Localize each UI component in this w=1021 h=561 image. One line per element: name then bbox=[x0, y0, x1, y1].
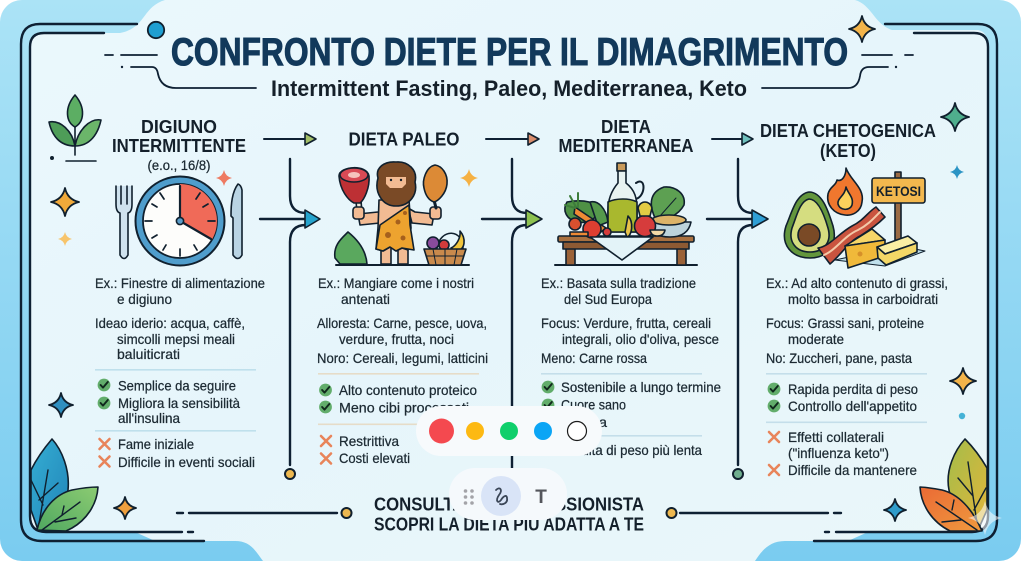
list: pros: ra bbox=[594, 414, 607, 430]
icon: avocado, flame, bacon, cheese and sign bbox=[784, 168, 925, 268]
heading: mediterranea bbox=[558, 116, 694, 156]
heading: paleo: DIETA PALEO bbox=[348, 128, 460, 150]
text: description: Ex.: Mangiare come i nostri bbox=[318, 275, 474, 291]
list: pros: Meno cibi processati bbox=[339, 400, 469, 416]
panel: dieta chetogenica bbox=[760, 120, 948, 478]
list: pros bbox=[318, 382, 479, 425]
icon: leaves bottom left bbox=[31, 439, 98, 531]
text: description: Focus: Grassi sani, proteine bbox=[766, 315, 924, 331]
text: description: Ex.: Ad alto contenuto di grassi, bbox=[766, 275, 948, 291]
list: cons: Difficile da mantenere bbox=[788, 462, 917, 478]
title decoration lines bbox=[105, 22, 913, 88]
icon: leaves bottom right bbox=[920, 439, 987, 531]
text: description: Alloresta: Carne, pesce, uova, bbox=[317, 315, 487, 331]
text: description: moderate bbox=[788, 331, 844, 347]
list: pros bbox=[95, 378, 256, 432]
text: description: integrali, olio d'oliva, pesce bbox=[562, 331, 719, 347]
heading: mediterranea: MEDITERRANEA bbox=[558, 135, 694, 156]
text: description: Noro: Cereali, legumi, latticini bbox=[317, 350, 488, 366]
list: cons bbox=[321, 433, 410, 466]
list: cons: Perdita di peso più lenta bbox=[561, 442, 702, 458]
toolbar: drawing tools: T bbox=[535, 487, 547, 508]
heading: keto: (KETO) bbox=[820, 140, 876, 161]
panel: dieta mediterranea bbox=[541, 116, 721, 458]
list: pros: Cuore sano bbox=[561, 396, 626, 412]
subtitle: Intermittent Fasting, Paleo, Mediterranea, Keto bbox=[271, 76, 747, 101]
icon: clock with fork and knife bbox=[116, 176, 242, 266]
list: pros bbox=[541, 379, 721, 437]
text: description bbox=[541, 275, 719, 375]
list: cons: Restrittiva bbox=[339, 433, 399, 449]
text: description: Focus: Verdure, frutta, cereali bbox=[541, 315, 711, 331]
footer call to action: CONSULTA UN PROFESSIONISTA bbox=[374, 494, 644, 514]
footer call to action: SCOPRI LA DIETA PIU ADATTA A TE bbox=[374, 514, 644, 534]
icon: plant sprig bbox=[49, 95, 101, 161]
text: description: simcolli mepsi meali bbox=[117, 331, 235, 347]
list: cons: Effetti collaterali bbox=[788, 429, 884, 445]
list: pros: Migliora la sensibilità bbox=[118, 395, 240, 411]
text: description bbox=[766, 275, 948, 375]
list: pros: Rapida perdita di peso bbox=[788, 381, 918, 397]
text: description: baluiticrati bbox=[117, 346, 180, 362]
list: cons: ("influenza keto") bbox=[788, 445, 889, 461]
text: description: antenati bbox=[341, 291, 390, 307]
text: description: e digiuno bbox=[117, 291, 172, 307]
heading: keto bbox=[760, 120, 936, 161]
toolbar: drawing tools bbox=[449, 468, 567, 520]
text: description: No: Zuccheri, pane, pasta bbox=[766, 350, 912, 366]
list: cons bbox=[100, 436, 255, 470]
toolbar: colour picker bbox=[416, 406, 602, 456]
icon: caveman with ham, drumstick and basket bbox=[335, 162, 469, 265]
footer call to action bbox=[177, 494, 841, 534]
text: description: Ex.: Finestre di alimentazione bbox=[95, 275, 265, 291]
text: description: verdure, frutta, noci bbox=[339, 331, 454, 347]
heading: mediterranea: DIETA bbox=[601, 116, 651, 137]
list: cons: Fame iniziale bbox=[118, 436, 194, 452]
heading: digiuno: DIGIUNO bbox=[141, 116, 217, 137]
list: cons: Costi elevati bbox=[339, 450, 410, 466]
text: description: Meno: Carne rossa bbox=[541, 350, 647, 366]
text: description: del Sud Europa bbox=[564, 291, 652, 307]
panel: dieta paleo bbox=[317, 128, 488, 466]
icon: olive oil, vegetables and table bbox=[555, 163, 697, 265]
connector arrows bbox=[260, 133, 768, 479]
heading: keto: DIETA CHETOGENICA bbox=[760, 120, 936, 141]
list: pros: Controllo dell'appetito bbox=[788, 398, 917, 414]
heading: digiuno: INTERMITTENTE bbox=[112, 135, 246, 156]
list: cons bbox=[769, 429, 917, 478]
title: CONFRONTO DIETE PER IL DIMAGRIMENTO bbox=[171, 31, 848, 74]
icon: avocado, flame, bacon, cheese and sign: KETOSI bbox=[876, 183, 921, 199]
heading: digiuno bbox=[112, 116, 246, 173]
list: cons: Difficile in eventi sociali bbox=[118, 454, 255, 470]
text: description: molto bassa in carboidrati bbox=[788, 291, 938, 307]
heading: digiuno: (e.o., 16/8) bbox=[148, 157, 210, 173]
list: pros: Semplice da seguire bbox=[118, 378, 236, 394]
list: pros bbox=[766, 381, 927, 423]
text: description: Ex.: Basata sulla tradizione bbox=[541, 275, 696, 291]
text: description bbox=[317, 275, 488, 375]
list: pros: all'insulina bbox=[118, 410, 180, 426]
list: pros: Alto contenuto proteico bbox=[339, 382, 477, 398]
watermark sparkle bbox=[968, 501, 1002, 535]
panel: digiuno intermittente bbox=[95, 116, 265, 470]
text: description bbox=[95, 275, 265, 371]
list: pros: Sostenibile a lungo termine bbox=[561, 379, 721, 395]
text: description: Ideao iderio: acqua, caffè, bbox=[95, 315, 245, 331]
